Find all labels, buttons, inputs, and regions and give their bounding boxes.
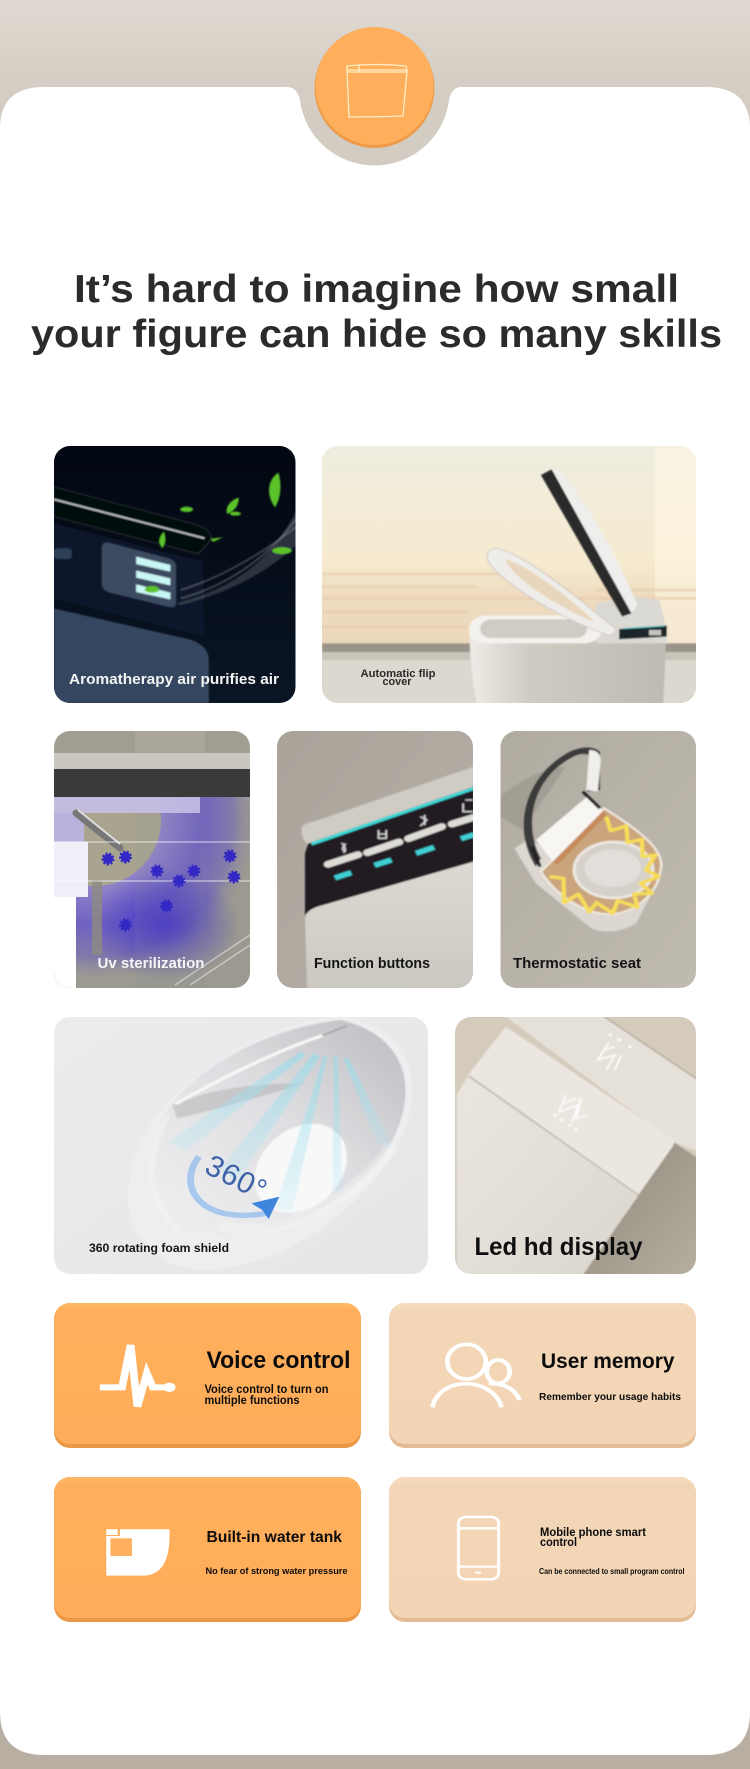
- label: automatic flip cover: cover: [382, 676, 412, 688]
- text: built-in water tank: Built-in water tank: [206, 1529, 342, 1546]
- arrow: rotation: [191, 1157, 279, 1219]
- tile: built-in water tank: [54, 1477, 361, 1622]
- icon: water tank: [106, 1529, 170, 1576]
- label: 360 degrees: 360°: [200, 1149, 272, 1207]
- panel: thermostatic seat: [500, 731, 696, 988]
- text: user memory: [539, 1350, 681, 1403]
- label: uv sterilization: Uv sterilization: [98, 955, 204, 972]
- label: automatic flip cover: Automatic flip: [360, 668, 436, 680]
- icon: pulse: [100, 1345, 175, 1407]
- text: voice control: Voice control: [206, 1347, 350, 1374]
- text: voice control: [204, 1347, 350, 1407]
- label: led hd display: Led hd display: [474, 1233, 643, 1261]
- tile: user memory: [389, 1303, 696, 1448]
- text: built-in water tank: [206, 1529, 348, 1577]
- title: It’s hard to imagine how small: [74, 268, 679, 311]
- icon: phone: [458, 1517, 499, 1579]
- panel: automatic flip cover: [322, 446, 698, 705]
- text: voice control: Voice control to turn on: [204, 1384, 328, 1396]
- text: mobile phone smart control: Mobile phone smart: [540, 1525, 646, 1539]
- text: mobile phone smart control: Can be connected to small program control: [539, 1567, 684, 1576]
- icon: users: [432, 1344, 520, 1407]
- text: mobile phone smart control: [539, 1525, 684, 1576]
- text: voice control: multiple functions: [204, 1395, 300, 1407]
- label: function buttons: Function buttons: [314, 955, 430, 972]
- panel: aromatherapy air: [54, 446, 296, 703]
- tile: mobile phone smart control: [389, 1477, 696, 1622]
- icon: bacteria dots: [103, 851, 239, 930]
- text: user memory: User memory: [541, 1350, 675, 1373]
- panel: function buttons: [277, 731, 474, 988]
- text: user memory: Remember your usage habits: [539, 1391, 681, 1403]
- icon: orange badge with toilet tank: [314, 27, 434, 148]
- tile: voice control: [54, 1303, 361, 1448]
- label: automatic flip cover: [360, 669, 435, 685]
- panel: 360 rotating foam shield: [54, 1017, 428, 1274]
- title: your figure can hide so many skills: [31, 313, 722, 356]
- leaves: [145, 473, 292, 593]
- text: mobile phone smart control: control: [540, 1535, 577, 1549]
- text: built-in water tank: No fear of strong water pressure: [206, 1566, 348, 1577]
- label: thermostatic seat: Thermostatic seat: [513, 955, 641, 972]
- title: [31, 268, 722, 356]
- nozzle: [76, 813, 120, 848]
- label: foam shield: 360 rotating foam shield: [89, 1241, 229, 1255]
- panel: led hd display: [455, 1017, 698, 1275]
- panel: uv sterilization: [54, 731, 250, 988]
- label: aromatherapy: Aromatherapy air purifies air: [69, 671, 279, 688]
